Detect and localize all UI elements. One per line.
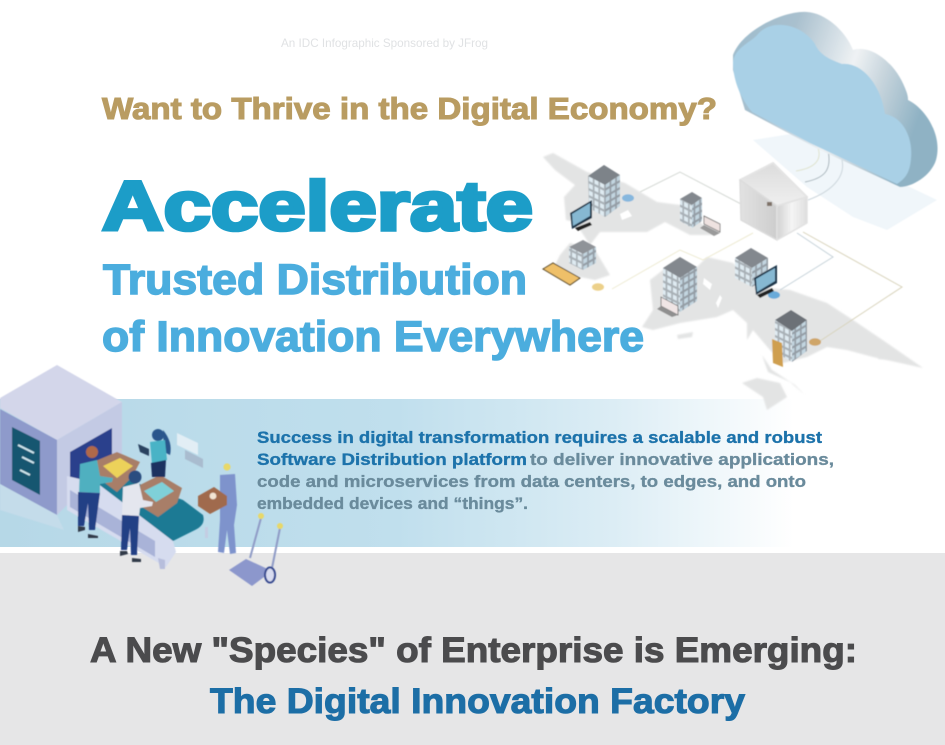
dots: network nodes (592, 194, 821, 346)
building 4 (663, 257, 697, 312)
sponsor line: An IDC Infographic Sponsored by JFrog (281, 36, 488, 50)
intro text (257, 428, 834, 513)
phone 6 (772, 339, 783, 367)
illustration: factory conveyor (0, 365, 283, 586)
monitor 1 (570, 200, 592, 231)
building 1 (588, 165, 620, 217)
building 6 (775, 310, 807, 362)
hand trolley (229, 513, 283, 586)
cloud (733, 12, 938, 187)
person 1 (78, 446, 113, 538)
building 5 (735, 248, 768, 287)
intro text: embedded devices and “things”. (257, 494, 528, 513)
heading: question: Want to Thrive in the Digital Economy? (102, 91, 717, 126)
cloud shadow (753, 133, 937, 230)
heading: Accelerate: Accelerate (102, 167, 533, 245)
footer heading: digital innovation factory: The Digital Innovation Factory (210, 682, 746, 721)
phone 3 (543, 263, 580, 285)
monitor 5 (754, 265, 777, 298)
server box (740, 163, 807, 240)
intro text: code and microservices from data centers, to edges, and onto (257, 472, 806, 491)
connection lines (612, 172, 902, 341)
panel: grey footer (0, 553, 945, 745)
map: world landmasses (543, 153, 923, 410)
box 1 (93, 452, 140, 492)
footer heading: new species: A New "Species" of Enterprise is Emerging: (90, 631, 857, 670)
building 3 (569, 240, 596, 270)
panel: intro band (0, 399, 945, 547)
laptop 4 (657, 297, 678, 317)
robot (198, 463, 237, 554)
cloud cables (796, 148, 843, 200)
intro text: Software Distribution platform (257, 450, 527, 469)
heading: Trusted Distribution: Trusted Distribution (103, 256, 527, 304)
building 2 (680, 192, 702, 228)
conveyor belt (67, 475, 208, 569)
person 3 (138, 429, 171, 477)
intro text: to deliver innovative applications, (530, 450, 834, 469)
factory machine (0, 365, 122, 530)
intro text: Success in digital transformation requires a scalable and robust (257, 428, 822, 447)
person 2 (120, 470, 153, 562)
heading: of Innovation Everywhere: of Innovation Everywhere (102, 313, 644, 361)
map speckles (620, 210, 722, 308)
laptop 2 (700, 216, 720, 236)
illustration: world network (543, 12, 938, 410)
box 2 (140, 475, 182, 517)
floating card (177, 433, 203, 468)
